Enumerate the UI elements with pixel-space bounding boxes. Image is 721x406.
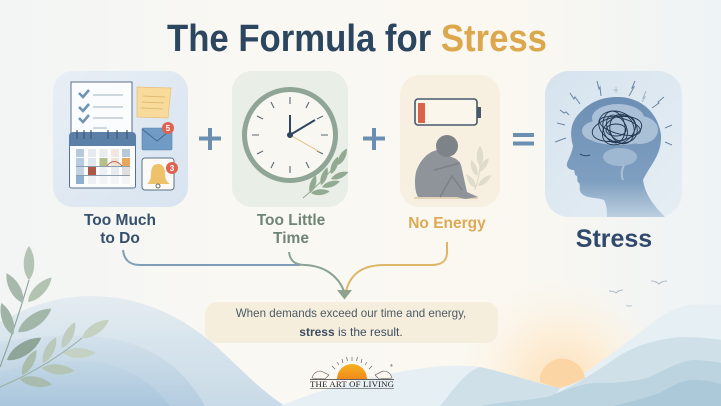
arrow: no energy connector [346,242,447,291]
callout: When demands exceed our time and energy, [236,307,466,320]
logo: the art of living: THE ART OF LIVING [310,379,395,389]
icon: low battery [415,99,481,125]
icon: bell: 3 [170,164,175,173]
icon: clock [244,90,336,180]
label: too little time: Too Little [257,212,326,229]
icon: leaf branch left [0,246,112,390]
icon: envelope: 5 [166,124,171,133]
icon: sticky note [137,87,171,118]
arrow: too little time connector [289,252,344,291]
label: no energy: No Energy [408,215,486,232]
icon: brain clouds [582,104,658,180]
icon: calendar [69,130,136,188]
arrowhead [337,290,352,300]
label: stress: Stress [576,225,652,253]
callout: stress is the result. [299,325,403,339]
icon: sitting person [414,135,478,199]
icon: stress sparks [555,81,672,145]
panel: no energy [400,75,500,207]
plus sign 2 [363,128,385,150]
panel: too little time [232,71,349,207]
plus sign 1 [199,128,221,150]
text: to Do [100,230,140,247]
arrow: too much to do connector [123,250,300,265]
text: Time [273,230,309,247]
icon: birds [609,281,667,306]
panel: stress [545,71,682,217]
icon: faded plant [464,146,493,190]
callout [205,302,498,343]
icon: head silhouette [567,97,665,217]
panel: too much to do [53,71,188,207]
landscape: right waves [280,305,721,406]
icon: clock leaves [303,147,349,198]
equals sign [513,135,534,144]
title: The Formula for Stress [167,18,547,60]
icon: checklist [71,82,132,137]
icon: tangled scribble [590,105,644,151]
logo: the art of living [310,357,395,389]
label: too much to do: Too Much [84,212,156,229]
landscape: left waves [0,296,285,406]
logo: the art of living: ® [390,363,393,368]
